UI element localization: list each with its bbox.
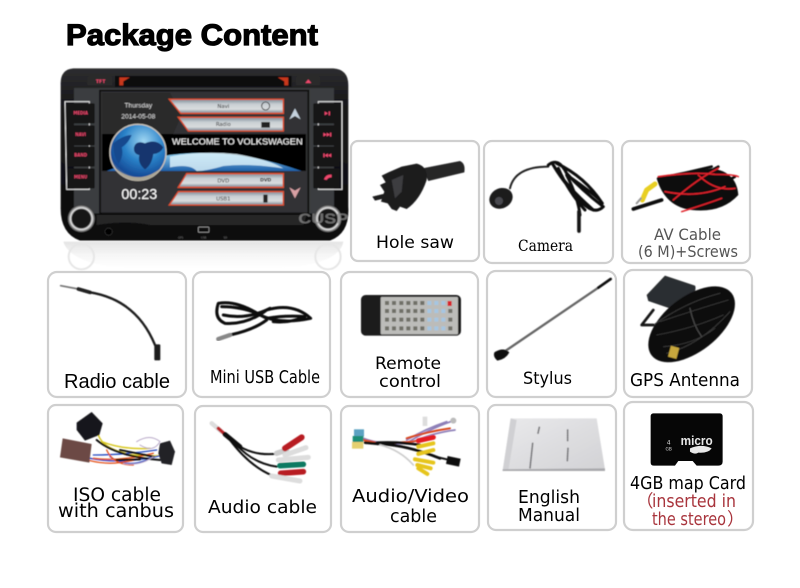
menu button Navi: Navi bbox=[217, 104, 229, 110]
label: map card line 3: the stereo bbox=[652, 510, 726, 530]
stylus frame bbox=[487, 271, 616, 397]
menu button Radio: Radio bbox=[216, 122, 231, 128]
clock: 00:23 bbox=[121, 187, 157, 203]
label: audio video line 1: Audio/Video bbox=[352, 487, 469, 507]
planet highlight bbox=[170, 153, 283, 171]
lower ports: GPS bbox=[178, 235, 184, 239]
panel: mini USB cable bbox=[193, 272, 330, 397]
head unit stereo bbox=[61, 68, 349, 269]
label: remote line 2: control bbox=[379, 372, 441, 392]
top slot with TFT and eject buttons: TFT bbox=[96, 79, 106, 85]
panel: GPS antenna bbox=[624, 270, 752, 397]
label: GPS antenna: GPS Antenna bbox=[630, 371, 740, 391]
globe bbox=[110, 124, 166, 181]
panel: camera bbox=[484, 141, 613, 263]
right side buttons bbox=[313, 102, 342, 189]
panel: stylus bbox=[487, 271, 616, 397]
watermark: CUSP bbox=[298, 211, 349, 227]
label: ISO line 2: with canbus bbox=[58, 501, 174, 522]
left side buttons: BAND bbox=[74, 153, 88, 158]
menu button USB1 bbox=[169, 192, 283, 205]
ISO frame bbox=[48, 405, 183, 532]
icon: micro SD card: GB bbox=[665, 446, 672, 452]
date block: Thursday bbox=[124, 103, 153, 110]
menu button DVD: DVD bbox=[260, 177, 271, 183]
label: map card line 3: ） bbox=[727, 510, 744, 530]
mini USB frame bbox=[193, 272, 330, 397]
icon: remote control bbox=[361, 295, 461, 336]
icon: mini USB cable bbox=[217, 303, 311, 339]
label: audio cable: Audio cable bbox=[208, 497, 317, 518]
hole saw frame bbox=[351, 141, 479, 261]
left volume knob bbox=[68, 205, 95, 232]
icon: GPS antenna bbox=[635, 272, 748, 377]
camera frame bbox=[484, 141, 613, 263]
icon: AV cable bbox=[633, 167, 738, 212]
icon: micro SD card: 4 bbox=[667, 439, 671, 446]
date block bbox=[102, 93, 182, 134]
label: map card line 1: 4GB map Card bbox=[630, 474, 746, 494]
label: camera: Camera bbox=[518, 237, 573, 255]
icon: ISO cable bbox=[60, 412, 175, 465]
label: mini USB cable: Mini USB Cable bbox=[210, 367, 320, 388]
right tune knob bbox=[314, 205, 342, 232]
panel: audio cable bbox=[195, 406, 331, 532]
label: hole saw: Hole saw bbox=[376, 233, 454, 253]
menu button DVD: DVD bbox=[217, 178, 229, 184]
icon: audio video cable bbox=[352, 417, 461, 474]
menu button DVD bbox=[178, 174, 283, 187]
label: manual line 1: English bbox=[518, 488, 580, 508]
remote control frame bbox=[341, 272, 478, 397]
panel: hole saw bbox=[351, 141, 479, 261]
lower ports bbox=[105, 227, 242, 239]
icon: audio cable bbox=[212, 423, 308, 481]
AV cable frame bbox=[622, 141, 750, 263]
menu button USB1: USB1 bbox=[216, 196, 230, 202]
icon: stylus bbox=[494, 279, 611, 361]
panel: audio video cable bbox=[341, 406, 479, 532]
stereo reflection bbox=[63, 242, 343, 269]
label: audio video line 2: cable bbox=[390, 507, 437, 527]
radio cable frame bbox=[48, 272, 186, 397]
icon: radio cable bbox=[61, 286, 160, 360]
icon: manual booklet bbox=[503, 418, 605, 471]
left side buttons: MEDIA bbox=[73, 111, 89, 116]
manual frame bbox=[488, 405, 616, 530]
panel: remote control bbox=[341, 272, 478, 397]
panel: ISO cable bbox=[48, 405, 183, 532]
icon: down arrow bbox=[289, 187, 301, 198]
label: map card line 2: （ bbox=[636, 492, 654, 512]
menu button Navi bbox=[169, 99, 283, 113]
welcome band bbox=[102, 134, 306, 171]
map card frame bbox=[624, 402, 753, 530]
lower ports: SD bbox=[223, 235, 227, 239]
planet arc bbox=[107, 153, 302, 171]
label: AV cable line 1: AV Cable bbox=[654, 225, 721, 244]
panel: map card bbox=[624, 402, 753, 530]
left side buttons bbox=[65, 102, 95, 189]
screen bezel bbox=[74, 88, 334, 213]
label: manual line 2: Manual bbox=[518, 506, 580, 526]
icon: micro SD card bbox=[651, 413, 723, 466]
screen bbox=[100, 91, 308, 213]
label: remote line 1: Remote bbox=[375, 354, 441, 374]
left side buttons: MENU bbox=[74, 174, 87, 179]
audio video frame bbox=[341, 406, 479, 532]
icon: hole saw bbox=[372, 161, 465, 211]
icon: up arrow bbox=[289, 108, 301, 119]
lower ports: USB bbox=[201, 235, 207, 239]
GPS frame bbox=[624, 270, 752, 397]
label: AV cable line 2: (6 M)+Screws bbox=[638, 242, 738, 261]
top slot with TFT and eject buttons bbox=[87, 76, 320, 87]
left side buttons: NAVI bbox=[75, 132, 87, 137]
icon: camera bbox=[486, 162, 603, 231]
panel: radio cable bbox=[48, 272, 186, 397]
welcome text: WELCOME TO VOLKSWAGEN bbox=[172, 137, 303, 147]
panel: English manual bbox=[488, 405, 616, 530]
icon: micro SD card: micro bbox=[681, 434, 713, 448]
label: stylus: Stylus bbox=[523, 369, 572, 389]
menu button Radio bbox=[178, 117, 283, 131]
audio cable frame bbox=[195, 406, 331, 532]
glossy lower band bbox=[97, 215, 307, 225]
panel: AV cable bbox=[622, 141, 750, 263]
stereo body bbox=[61, 68, 348, 241]
title: Package Content bbox=[66, 19, 318, 52]
label: ISO line 1: ISO cable bbox=[73, 485, 161, 506]
label: radio cable: Radio cable bbox=[64, 371, 170, 393]
date block: 2014-05-08 bbox=[121, 114, 156, 121]
label: map card line 2: inserted in bbox=[652, 492, 736, 512]
